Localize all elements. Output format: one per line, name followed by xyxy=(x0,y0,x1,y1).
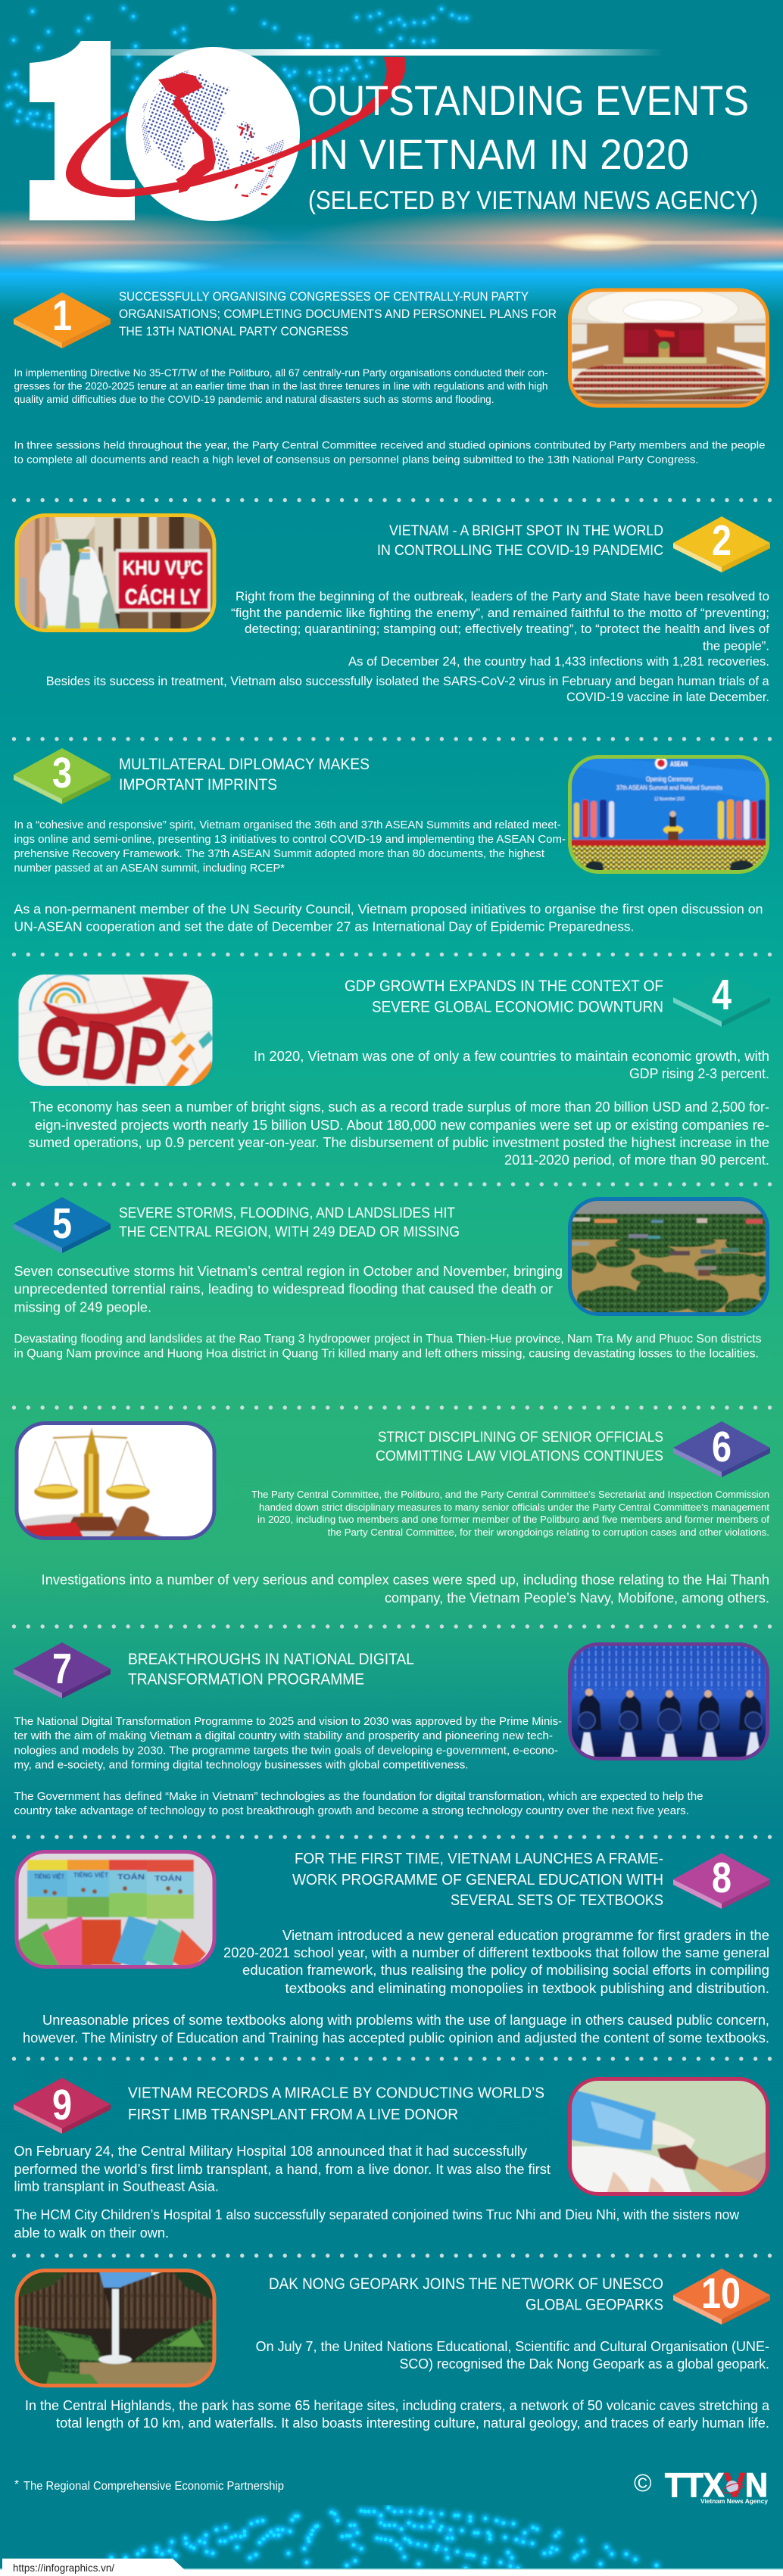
heading 8: SEVERAL SETS OF TEXTBOOKS xyxy=(451,1892,663,1909)
heading 10: DAK NONG GEOPARK JOINS THE NETWORK OF UNESCO xyxy=(269,2275,663,2293)
starfield: bottom globe xyxy=(111,2508,657,2568)
heading 4 xyxy=(345,978,663,1016)
body text 1b: to complete all documents and reach a high level of consensus on personnel plans being submitted to the 13th National Party Congress. xyxy=(14,453,698,465)
body text 4: GDP rising 2-3 percent. xyxy=(629,1066,769,1081)
body text 6b xyxy=(42,1573,769,1606)
title xyxy=(307,76,758,215)
heading 8: FOR THE FIRST TIME, VIETNAM LAUNCHES A FRAME- xyxy=(295,1851,663,1867)
body text 9: performed the world’s first limb transplant, a hand, from a live donor. It was also the first xyxy=(14,2162,551,2177)
heading 2: VIETNAM - A BRIGHT SPOT IN THE WORLD xyxy=(389,522,663,539)
body text 2: Right from the beginning of the outbreak, leaders of the Party and State have been resolved to xyxy=(236,589,769,603)
body text 1: gresses for the 2020-2025 tenure at an earlier time than in the last three tenures in line with regulations and with high xyxy=(14,380,548,392)
heading 2: IN CONTROLLING THE COVID-19 PANDEMIC xyxy=(377,542,663,559)
red orbit xyxy=(66,57,406,197)
title: OUTSTANDING EVENTS xyxy=(307,76,749,124)
panel: event 8 xyxy=(15,1850,770,2046)
body text 7b: The Government has defined “Make in Vietnam” technologies as the foundation for digital transformation, which are expected to help the xyxy=(14,1790,703,1803)
heading 6: STRICT DISCIPLINING OF SENIOR OFFICIALS xyxy=(378,1429,663,1445)
body text 3: ings online and semi-online, presenting 13 initiatives to control COVID-19 and implementing the ASEAN Com- xyxy=(14,833,566,846)
photo: flooded region xyxy=(568,1197,774,1319)
photo: ASEAN summit: 37th ASEAN Summit and Related Summits xyxy=(616,784,722,791)
badge 4 xyxy=(673,971,770,1027)
globe digit 0 xyxy=(126,47,300,221)
body text 3b xyxy=(14,901,763,934)
heading 8: WORK PROGRAMME OF GENERAL EDUCATION WITH xyxy=(292,1872,663,1888)
badge 1: 1 xyxy=(52,292,72,340)
white streak xyxy=(111,49,663,56)
photo: Dak Nong waterfall xyxy=(15,2269,217,2388)
body text 8: textbooks and eliminating monopolies in textbook publishing and distribution. xyxy=(285,1981,769,1996)
body text 9 xyxy=(14,2144,740,2241)
heading 3 xyxy=(119,756,370,794)
photo: party congress hall xyxy=(568,288,769,407)
body text 3: In a “cohesive and responsive” spirit, Vietnam organised the 36th and 37th ASEAN Summits and related meet- xyxy=(14,819,560,831)
badge 1 xyxy=(14,292,111,348)
big number 10 with globe xyxy=(30,41,663,221)
source URL: https://infographics.vn/ xyxy=(13,2562,114,2574)
digit 1 xyxy=(30,41,135,220)
badge 5 xyxy=(14,1197,111,1253)
title: IN VIETNAM IN 2020 xyxy=(308,130,689,178)
photo: quarantine area: CÁCH LY xyxy=(125,584,201,610)
badge 2: 2 xyxy=(712,516,732,565)
photo: new textbooks: TOÁN xyxy=(154,1873,182,1883)
body text 2: “fight the pandemic like fighting the enemy”, and remained faithful to the motto of “preventing; xyxy=(231,606,769,620)
body text 7b xyxy=(14,1790,703,1817)
photo: ASEAN summit: Opening Ceremony xyxy=(646,775,693,784)
photo: ASEAN summit: ASEAN xyxy=(670,760,688,768)
body text 10: total length of 10 km, and waterfalls. It also boasts interesting culture, natural geology, and traces of early human life. xyxy=(56,2415,769,2431)
body text 1b: In three sessions held throughout the year, the Party Central Committee received and studied opinions contributed by Party members and the people xyxy=(14,439,766,451)
heading 1: THE 13TH NATIONAL PARTY CONGRESS xyxy=(119,324,348,338)
badge 6 xyxy=(673,1421,770,1477)
body text 4: 2011-2020 period, of more than 90 percent. xyxy=(504,1152,769,1168)
body text 4: sumed operations, up 0.9 percent year-on-year. The disbursement of public investment posted the highest increase in the xyxy=(29,1135,769,1150)
body text 6b: Investigations into a number of very serious and complex cases were sped up, including those relating to the Hai Thanh xyxy=(42,1573,769,1588)
panel: event 1 xyxy=(14,288,769,465)
body text 5: unprecedented torrential rains, leading to widespread flooding that caused the death or xyxy=(14,1282,553,1297)
logo: TTXVN Vietnam News Agency: TTXVN xyxy=(665,2467,768,2504)
body text 7: The National Digital Transformation Programme to 2025 and vision to 2030 was approved by the Prime Minis- xyxy=(14,1715,562,1728)
body text 1: In implementing Directive No 35-CT/TW of the Politburo, all 67 centrally-run Party organisations conducted their con- xyxy=(14,367,548,379)
heading 5: THE CENTRAL REGION, WITH 249 DEAD OR MISSING xyxy=(119,1224,460,1240)
body text 5b: in Quang Nam province and Huong Hoa district in Quang Tri killed many and left others missing, causing devastating losses to the localities. xyxy=(14,1348,759,1361)
body text 5: missing of 249 people. xyxy=(14,1299,151,1315)
body text 8: education framework, thus realising the policy of mobilising social efforts in compiling xyxy=(242,1963,769,1978)
body text 2: COVID-19 vaccine in late December. xyxy=(566,690,769,704)
badge 10 xyxy=(673,2269,770,2325)
badge 10: 10 xyxy=(701,2269,741,2318)
body text 5b xyxy=(14,1333,762,1361)
body text 2: the people”. xyxy=(703,639,769,653)
body text 1 xyxy=(14,367,548,405)
photo: GDP chart xyxy=(15,975,217,1090)
body text 9: The HCM City Children’s Hospital 1 also successfully separated conjoined twins Truc Nhi and Dieu Nhi, with the sisters now xyxy=(14,2207,740,2222)
panel: event 7 xyxy=(14,1642,769,1817)
body text 6: in 2020, including two members and one former member of the Politburo and five members and former members of xyxy=(257,1514,769,1525)
body text 8: however. The Ministry of Education and Training has accepted public opinion and adjusted the content of some textbooks. xyxy=(23,2031,769,2046)
body text 3: prehensive Recovery Framework. The 37th ASEAN Summit adopted more than 80 documents, the highest xyxy=(14,847,545,860)
photo: quarantine area xyxy=(15,513,217,632)
badge 6: 6 xyxy=(712,1423,732,1471)
body text 3b: UN-ASEAN cooperation and set the date of December 27 as International Day of Epidemic Preparedness. xyxy=(14,919,635,934)
header band: glowing horizon xyxy=(0,207,783,326)
heading 7: TRANSFORMATION PROGRAMME xyxy=(128,1670,364,1689)
body text 10: SCO) recognised the Dak Nong Geopark as a global geopark. xyxy=(400,2356,769,2372)
photo: GDP chart: GDP xyxy=(31,997,171,1104)
panel: event 2 xyxy=(15,513,770,704)
badge 3: 3 xyxy=(52,749,72,797)
badge 2 xyxy=(673,516,770,572)
body text 2 xyxy=(46,589,769,704)
footer strip xyxy=(0,2559,783,2576)
body text 9: limb transplant in Southeast Asia. xyxy=(14,2179,219,2194)
body text 3 xyxy=(14,819,566,875)
body text 7: my, and e-society, and forming digital technology businesses with global competitiveness. xyxy=(14,1759,468,1772)
photo: quarantine area: KHU VỰC xyxy=(123,557,203,579)
heading 6 xyxy=(376,1429,663,1464)
photo: new textbooks: TOÁN xyxy=(117,1872,145,1882)
body text 4 xyxy=(29,1049,769,1168)
panel: event 6 xyxy=(15,1421,770,1606)
heading 10 xyxy=(269,2275,663,2314)
heading 9: VIETNAM RECORDS A MIRACLE BY CONDUCTING WORLD’S xyxy=(128,2085,544,2102)
badge 5: 5 xyxy=(52,1199,72,1248)
heading 1: SUCCESSFULLY ORGANISING CONGRESSES OF CENTRALLY-RUN PARTY xyxy=(119,289,529,304)
body text 3b: As a non-permanent member of the UN Security Council, Vietnam proposed initiatives to organise the first open discussion on xyxy=(14,901,763,916)
heading 1 xyxy=(119,289,557,338)
body text 6: handed down strict disciplinary measures to many senior officials under the Party Central Committee’s management xyxy=(259,1502,769,1513)
body text 4: The economy has seen a number of bright signs, such as a record trade surplus of more than 20 billion USD and 2,500 for- xyxy=(30,1099,769,1115)
body text 8: Unreasonable prices of some textbooks along with problems with the use of language in others caused public concern, xyxy=(42,2013,769,2028)
badge 8 xyxy=(673,1853,770,1909)
heading 8 xyxy=(292,1851,663,1909)
badge 8: 8 xyxy=(712,1854,732,1902)
body text 7b: country take advantage of technology to post breakthrough growth and become a strong technology country over the next five years. xyxy=(14,1804,689,1817)
photo: digital programme launch xyxy=(568,1642,769,1764)
photo: new textbooks: TIẾNG VIỆT xyxy=(73,1871,108,1879)
panel: event 9 xyxy=(14,2077,769,2241)
logo: TTXVN Vietnam News Agency: Vietnam News Agency xyxy=(700,2497,768,2505)
body text 6b: company, the Vietnam People’s Navy, Mobifone, among others. xyxy=(385,1591,769,1606)
photo: new textbooks xyxy=(15,1850,217,1973)
badge 7 xyxy=(14,1642,111,1698)
body text 7: ter with the aim of making Vietnam a digital country with stability and prosperity and pioneering new tech- xyxy=(14,1729,553,1742)
panel: event 10 xyxy=(15,2269,770,2431)
body text 2: As of December 24, the country had 1,433 infections with 1,281 recoveries. xyxy=(348,654,769,669)
body text 8: 2020-2021 school year, with a number of different textbooks that follow the same general xyxy=(223,1945,769,1960)
photo: ASEAN summit: 12 November 2020 xyxy=(654,797,685,802)
panel: event 3 xyxy=(14,748,769,934)
body text 5: Seven consecutive storms hit Vietnam’s central region in October and November, bringing xyxy=(14,1264,563,1279)
panel: event 4 xyxy=(15,971,770,1168)
badge 9 xyxy=(14,2078,111,2134)
heading 4: SEVERE GLOBAL ECONOMIC DOWNTURN xyxy=(372,998,663,1016)
heading 4: GDP GROWTH EXPANDS IN THE CONTEXT OF xyxy=(345,978,663,995)
starfield: top xyxy=(8,8,466,133)
badge 3 xyxy=(14,748,111,804)
body text 5 xyxy=(14,1264,563,1315)
heading 1: ORGANISATIONS; COMPLETING DOCUMENTS AND PERSONNEL PLANS FOR xyxy=(119,307,557,321)
copyright symbol: © xyxy=(634,2469,652,2496)
body text 7 xyxy=(14,1715,562,1772)
heading 10: GLOBAL GEOPARKS xyxy=(526,2296,663,2314)
heading 7 xyxy=(128,1651,414,1689)
map of Vietnam xyxy=(158,73,216,193)
body text 6: The Party Central Committee, the Politburo, and the Party Central Committee’s Secretariat and Inspection Commission xyxy=(251,1489,769,1500)
heading 2 xyxy=(377,522,663,559)
body text 6 xyxy=(251,1489,769,1538)
body text 2: Besides its success in treatment, Vietnam also successfully isolated the SARS-CoV-2 virus in February and began human trials of a xyxy=(46,674,769,688)
panel: event 5 xyxy=(14,1197,774,1361)
heading 5 xyxy=(119,1205,460,1240)
body text 2: detecting; quarantining; stamping out; effectively treating”, to “protect the health and lives of xyxy=(245,622,769,636)
body text 5b: Devastating flooding and landslides at the Rao Trang 3 hydropower project in Thua Thien-Hue province, Nam Tra My and Phuoc Son districts xyxy=(14,1333,762,1346)
body text 6: the Party Central Committee, for their wrongdoings relating to corruption cases and other violations. xyxy=(328,1527,769,1538)
photo: scales of justice xyxy=(15,1421,217,1545)
footnote: The Regional Comprehensive Economic Partnership xyxy=(23,2480,284,2493)
heading 9 xyxy=(128,2085,544,2123)
body text 8: Vietnam introduced a new general education programme for first graders in the xyxy=(282,1928,769,1943)
footnote: * xyxy=(14,2478,19,2491)
heading 3: MULTILATERAL DIPLOMACY MAKES xyxy=(119,756,370,773)
photo: ASEAN summit xyxy=(568,755,769,875)
body text 1b xyxy=(14,439,766,465)
body text 9: able to walk on their own. xyxy=(14,2225,169,2241)
badge 9: 9 xyxy=(52,2081,72,2129)
body text 10 xyxy=(25,2339,770,2431)
badge 4: 4 xyxy=(712,971,732,1019)
body text 10: In the Central Highlands, the park has some 65 heritage sites, including craters, a network of 50 volcanic caves stretching a xyxy=(25,2398,770,2413)
red island marks xyxy=(236,125,273,196)
body text 4: In 2020, Vietnam was one of only a few countries to maintain economic growth, with xyxy=(254,1049,769,1064)
body text 7: nologies and models by 2030. The programme targets the twin goals of developing e-government, e-econo- xyxy=(14,1745,558,1757)
body text 3: number passed at an ASEAN summit, including RCEP* xyxy=(14,862,285,875)
heading 3: IMPORTANT IMPRINTS xyxy=(119,776,277,794)
body text 8 xyxy=(23,1928,769,2046)
body text 1: quality amid difficulties due to the COVID-19 pandemic and natural disasters such as storms and flooding. xyxy=(14,394,494,405)
body text 4: eign-invested projects worth nearly 15 billion USD. About 180,000 new companies were set up or existing companies re- xyxy=(35,1118,769,1133)
heading 5: SEVERE STORMS, FLOODING, AND LANDSLIDES HIT xyxy=(119,1205,455,1221)
body text 10: On July 7, the United Nations Educational, Scientific and Cultural Organisation (UNE- xyxy=(256,2339,769,2354)
heading 9: FIRST LIMB TRANSPLANT FROM A LIVE DONOR xyxy=(128,2107,458,2123)
body text 9: On February 24, the Central Military Hospital 108 announced that it had successfully xyxy=(14,2144,527,2159)
photo: limb transplant xyxy=(568,2077,769,2197)
heading 7: BREAKTHROUGHS IN NATIONAL DIGITAL xyxy=(128,1651,414,1668)
photo: new textbooks: TIẾNG VIỆT xyxy=(34,1873,64,1880)
badge 7: 7 xyxy=(52,1645,72,1693)
heading 6: COMMITTING LAW VIOLATIONS CONTINUES xyxy=(376,1448,663,1464)
